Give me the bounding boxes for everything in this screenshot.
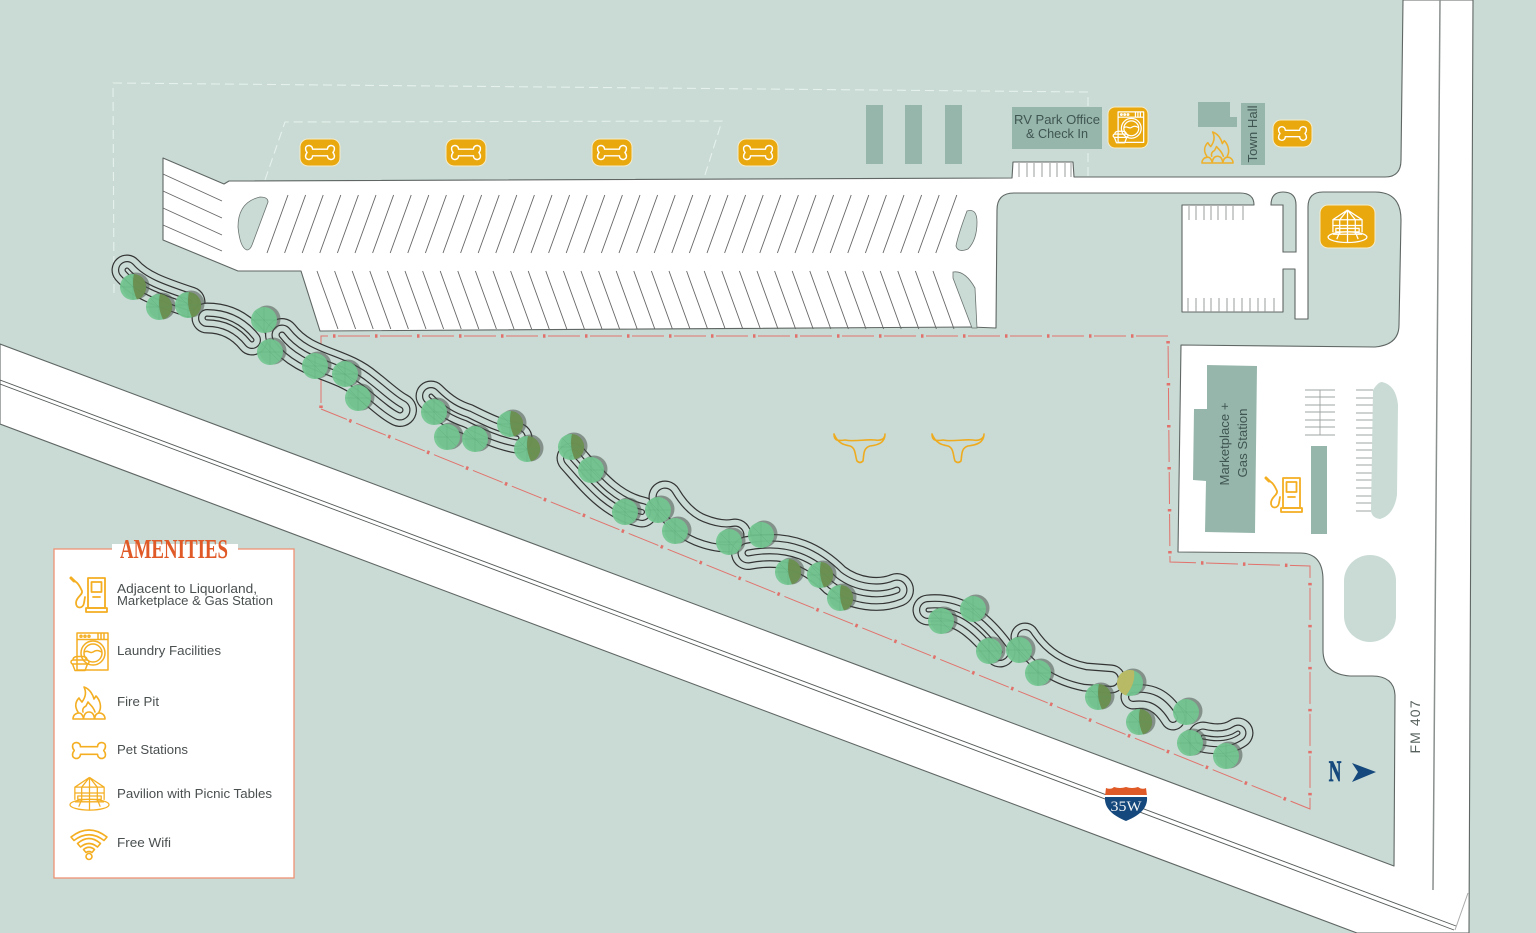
legend item: gas: Marketplace & Gas Station	[117, 593, 273, 608]
highway center line	[0, 380, 1456, 930]
pet station badge 3	[592, 139, 632, 166]
RV Park office building	[1012, 107, 1102, 149]
legend item: pet stations: Pet Stations	[117, 742, 188, 757]
north arrow	[1329, 755, 1376, 788]
pet station badge 2	[446, 139, 486, 166]
icon: gas pump	[1266, 478, 1302, 512]
shelter building	[1198, 102, 1237, 127]
panel: amenities legend	[54, 534, 294, 878]
pavilion badge	[1320, 205, 1375, 248]
contour swale 8	[928, 610, 1000, 652]
legend item: laundry: Laundry Facilities	[117, 643, 222, 658]
marketplace islands	[1344, 382, 1398, 642]
legend item: pavilion: Pavilion with Picnic Tables	[117, 786, 273, 801]
contour swale 5	[572, 458, 642, 512]
legend item: pavilion	[70, 777, 273, 811]
dashed boundary: RV park	[113, 83, 1088, 293]
legend item: pet stations	[73, 742, 188, 758]
legend item: fire pit: Fire Pit	[117, 694, 159, 709]
gas canopy	[1311, 446, 1327, 534]
RV Park office building: RV Park Office	[1014, 112, 1100, 127]
parking islands	[238, 192, 1296, 328]
legend item: gas: Adjacent to Liquorland,	[117, 581, 257, 596]
pet station badge 1	[300, 139, 340, 166]
interstate 35W shield	[1105, 787, 1147, 821]
red fence line	[321, 336, 1310, 809]
RV Park office building: & Check In	[1026, 126, 1088, 141]
legend item: wifi: Free Wifi	[117, 835, 171, 850]
legend item: wifi	[71, 830, 171, 860]
contour swale 1	[127, 270, 190, 302]
contour swale 4	[431, 396, 517, 438]
label: FM 407: FM 407	[1407, 700, 1423, 754]
corner line	[1455, 893, 1468, 930]
icon: longhorn east	[932, 434, 984, 462]
RV site buildings	[866, 105, 962, 164]
contour swale 9	[1025, 637, 1111, 679]
interstate 35W shield: 35W	[1110, 799, 1142, 815]
town hall building: Town Hall	[1245, 105, 1260, 163]
north arrow: N	[1329, 755, 1341, 788]
pet station badge 4	[738, 139, 778, 166]
legend item: laundry	[71, 633, 222, 670]
contour swale 10	[1133, 697, 1173, 718]
legend item: gas	[71, 578, 273, 612]
marketplace building: Gas Station	[1235, 408, 1250, 478]
trees	[120, 272, 1242, 769]
marketplace building: Marketplace +	[1217, 403, 1232, 485]
contour swale 11	[1203, 733, 1238, 739]
contour swale 3	[282, 335, 400, 410]
contour swale 6	[665, 497, 735, 536]
parking stall lines: north row	[267, 195, 957, 253]
heading: amenities: AMENITIES	[120, 534, 228, 564]
marketplace building	[1193, 365, 1257, 533]
contour swale 2	[207, 318, 252, 340]
icon: fire pit	[1202, 132, 1233, 163]
FM 407 center line	[1433, 0, 1440, 890]
icon: longhorn west	[834, 434, 885, 462]
title gap	[112, 544, 238, 554]
contour swale 7	[748, 551, 897, 594]
parking stall lines: marketplace	[1305, 390, 1373, 511]
legend item: fire pit	[73, 687, 159, 719]
parking stall lines: west row	[163, 174, 222, 251]
town hall building	[1241, 103, 1265, 165]
laundry badge	[1108, 107, 1148, 148]
parking stall lines: office and lot	[1019, 163, 1274, 312]
pet station badge 5	[1273, 120, 1312, 147]
parking stall lines: south row	[317, 271, 954, 329]
